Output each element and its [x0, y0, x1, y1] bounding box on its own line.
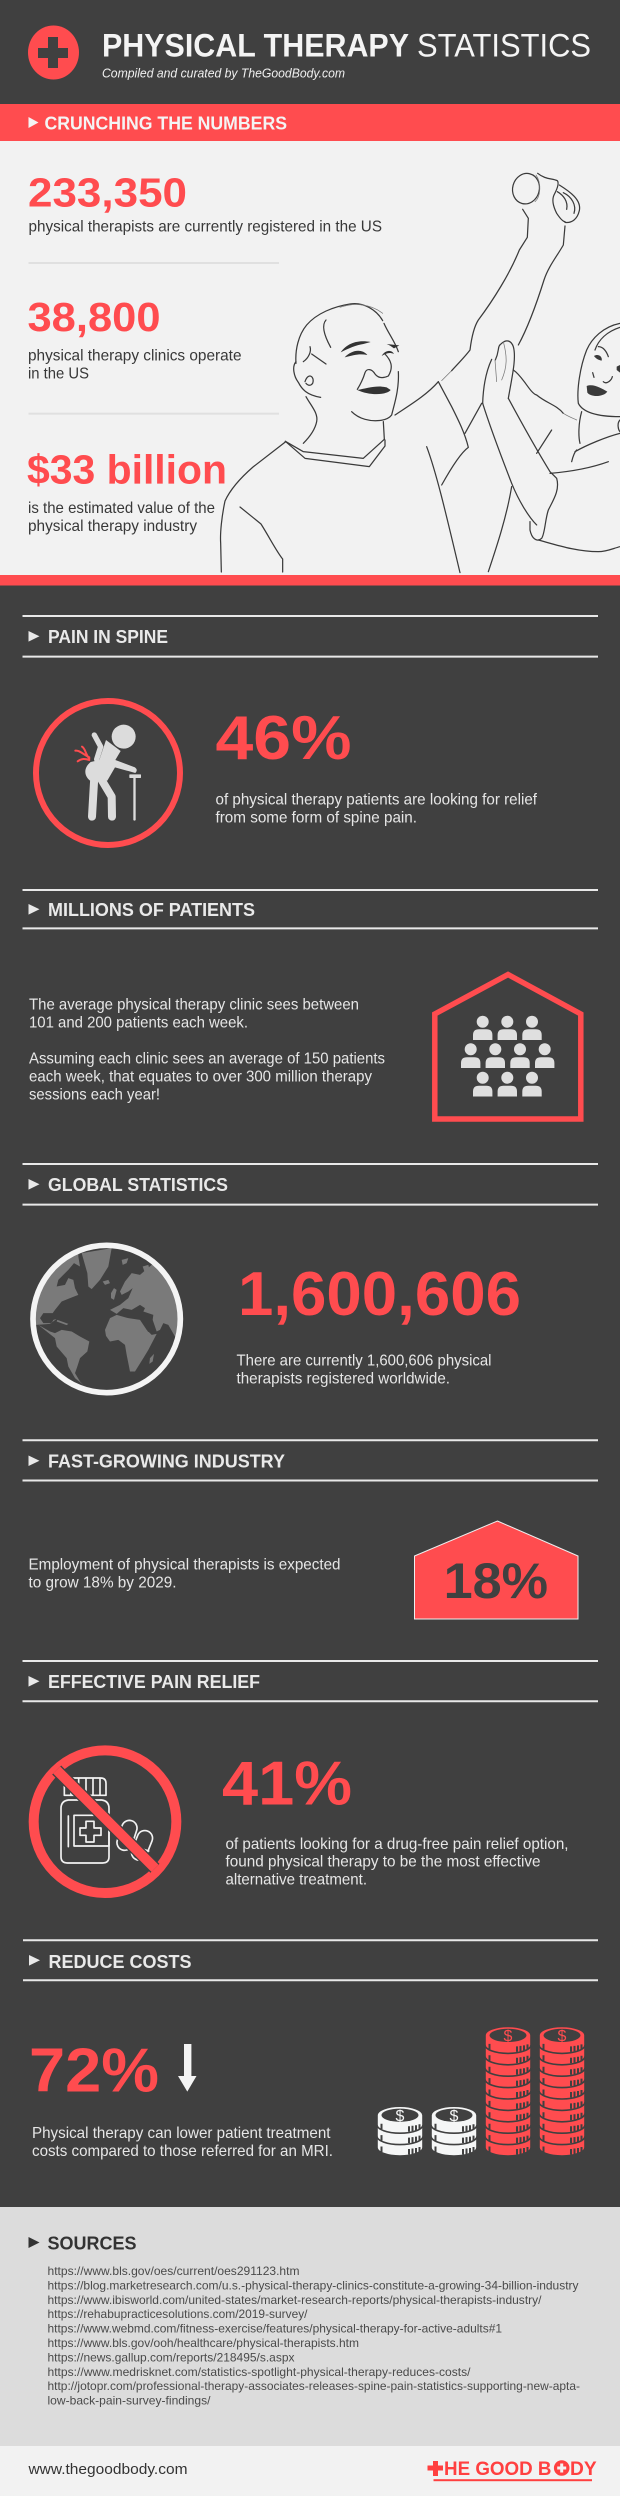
stat: 72%: 72%: [29, 2037, 159, 2106]
source list: https://www.bls.gov/ooh/healthcare/physical-therapists.htm: [48, 2336, 359, 2350]
illustration: therapist and patient line drawing: [221, 170, 620, 573]
red stack two: $: [558, 2028, 567, 2045]
red stack one: $: [504, 2028, 513, 2045]
patient head: [294, 304, 399, 421]
title: STATISTICS: [417, 28, 591, 64]
stat: 1,600,606: [236, 1260, 521, 1387]
source list: https://www.bls.gov/oes/current/oes291123.htm: [48, 2264, 300, 2278]
text block: [29, 996, 385, 1103]
text block: Assuming each clinic sees an average of 150 patients: [29, 1050, 385, 1068]
heading: [22, 1440, 598, 1480]
heading band: CRUNCHING THE NUMBERS: [44, 112, 287, 134]
source list: https://news.gallup.com/reports/218495/s.aspx: [48, 2350, 295, 2364]
red stack two: [539, 2026, 585, 2156]
text block: Employment of physical therapists is expected: [28, 1556, 340, 1573]
stat: 41%: found physical therapy to be the most effective: [226, 1854, 541, 1871]
subtitle: Compiled and curated by TheGoodBody.com: [102, 66, 345, 80]
text block: each week, that equates to over 300 million therapy: [29, 1068, 372, 1085]
stat: 46%: from some form of spine pain.: [216, 810, 417, 827]
stat: 38,800: [28, 294, 242, 382]
heading: SOURCES: [48, 2233, 136, 2254]
stat: 233,350: physical therapists are currently registered in the US: [28, 218, 382, 236]
stat: 1,600,606: therapists registered worldwide.: [236, 1370, 450, 1387]
stat: 38,800: physical therapy clinics operate: [28, 348, 242, 364]
source list: https://www.webmd.com/fitness-exercise/features/physical-therapy-for-active-adults#1: [48, 2322, 502, 2336]
white stack one: $: [396, 2108, 405, 2125]
title: PHYSICAL THERAPY: [102, 28, 409, 64]
icon: clinic with patients: [435, 974, 581, 1119]
ball and hand: [509, 170, 580, 222]
stat: 233,350: 233,350: [28, 170, 187, 216]
panel: crunching the numbers: [0, 104, 620, 586]
icon: globe: [30, 1245, 187, 1393]
stat: 41%: of patients looking for a drug-free pain relief option,: [226, 1836, 568, 1853]
stat: 46%: [216, 704, 538, 827]
website: www.thegoodbody.com: [27, 2461, 188, 2478]
panel: sources: [0, 2207, 620, 2446]
white stack two: [431, 2106, 477, 2156]
panel: fast-growing industry: [22, 1440, 598, 1619]
icon: medical cross logo: [28, 26, 79, 80]
source list: https://rehabupracticesolutions.com/2019-survey/: [48, 2307, 308, 2321]
logo: the good body: [428, 2458, 597, 2481]
heading: GLOBAL STATISTICS: [48, 1174, 228, 1195]
white stack two: $: [450, 2108, 459, 2125]
heading: [22, 616, 598, 657]
panel: millions of patients: [22, 890, 598, 1119]
therapist head: [572, 323, 620, 462]
white stack one: [377, 2106, 423, 2156]
stat: 72%: [29, 2037, 333, 2160]
stat: 72%: costs compared to those referred for an MRI.: [32, 2143, 333, 2160]
stat: 46%: 46%: [216, 704, 352, 773]
stat: 46%: of physical therapy patients are looking for relief: [216, 792, 538, 809]
logo: the good body: DY: [570, 2458, 597, 2480]
stat: 72%: Physical therapy can lower patient treatment: [32, 2125, 331, 2142]
panel: effective pain relief: [22, 1661, 598, 1893]
stat: 41%: alternative treatment.: [226, 1871, 367, 1888]
text block: [28, 1556, 340, 1591]
heading: [22, 1661, 598, 1701]
chart: coin stacks: [377, 2026, 585, 2156]
stat: $33 billion: physical therapy industry: [28, 518, 197, 535]
logo: the good body: HE GOOD B: [444, 2458, 552, 2480]
patient arm: [395, 209, 565, 415]
stat: 1,600,606: There are currently 1,600,606 physical: [236, 1352, 492, 1369]
heading: [23, 1940, 598, 1980]
heading: [22, 1164, 598, 1205]
panel: reduce costs: [23, 1940, 598, 2160]
text block: 101 and 200 patients each week.: [29, 1014, 248, 1032]
source list: [48, 2264, 580, 2408]
stat: $33 billion: $33 billion: [27, 446, 227, 492]
stat: $33 billion: is the estimated value of the: [28, 500, 215, 517]
arrow: down: [178, 2044, 196, 2092]
icon: person with back pain: [36, 701, 180, 845]
heading: FAST-GROWING INDUSTRY: [48, 1450, 286, 1472]
source list: http://jotopr.com/professional-therapy-associates-releases-spine-pain-statistics-supporting-new-apta-: [48, 2379, 580, 2393]
panel: global statistics: [22, 1164, 598, 1393]
icon: no medication: [34, 1750, 176, 1893]
badge: 18%: [414, 1521, 578, 1619]
text block: The average physical therapy clinic sees between: [29, 996, 359, 1014]
red stack one: [485, 2026, 531, 2156]
source list: https://www.medrisknet.com/statistics-spotlight-physical-therapy-reduces-costs/: [48, 2365, 471, 2379]
title: [102, 28, 591, 64]
source list: low-back-pain-survey-findings/: [48, 2394, 211, 2408]
stat: 41%: [222, 1750, 568, 1888]
therapist hands and arm: [483, 341, 620, 552]
source list: https://www.ibisworld.com/united-states/market-research-reports/physical-therapists-industry/: [48, 2293, 542, 2307]
stat: 233,350: [28, 170, 382, 236]
source list: https://blog.marketresearch.com/u.s.-physical-therapy-clinics-constitute-a-growing-34-billion-industry: [48, 2278, 579, 2292]
stat: 41%: 41%: [222, 1750, 352, 1818]
patient torso and shirt: [221, 382, 512, 573]
text block: sessions each year!: [29, 1086, 160, 1103]
stat: 38,800: 38,800: [28, 294, 160, 340]
heading: MILLIONS OF PATIENTS: [48, 899, 255, 920]
heading: EFFECTIVE PAIN RELIEF: [48, 1671, 260, 1692]
panel: pain in spine: [22, 616, 598, 845]
stat: 38,800: in the US: [28, 366, 89, 382]
header: [28, 26, 591, 80]
text block: to grow 18% by 2029.: [28, 1574, 176, 1591]
badge: 18%: 18%: [444, 1553, 548, 1609]
heading: PAIN IN SPINE: [48, 626, 168, 647]
footer: [0, 2446, 620, 2496]
heading: [22, 890, 598, 928]
heading band: [0, 104, 620, 141]
stat: $33 billion: [27, 446, 227, 535]
stat: 1,600,606: 1,600,606: [238, 1260, 521, 1329]
heading: REDUCE COSTS: [48, 1951, 192, 1972]
